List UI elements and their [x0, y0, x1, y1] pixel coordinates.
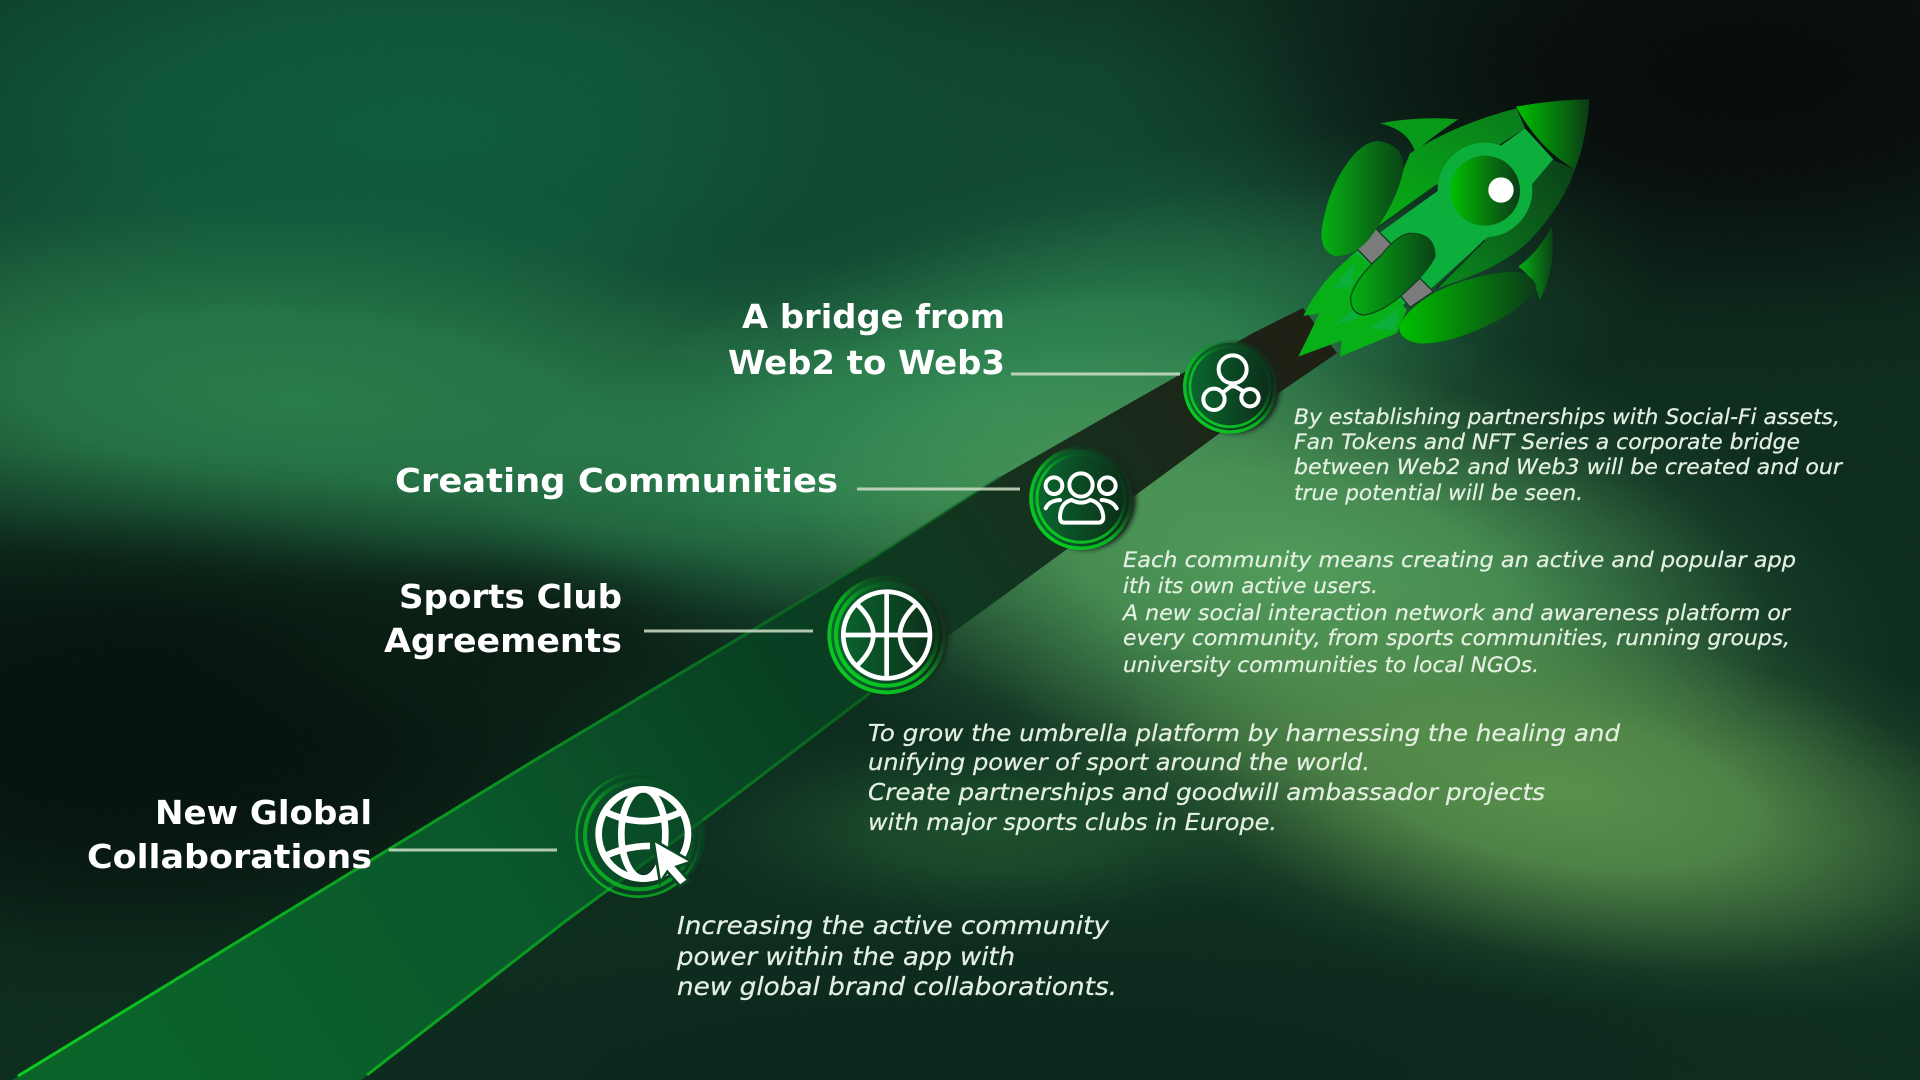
- description: [1294, 405, 1843, 505]
- step: Creating Communities: [395, 448, 1796, 677]
- heading: New Global: [155, 793, 372, 832]
- description: A new social interaction network and awareness platform or: [1121, 601, 1791, 625]
- description: true potential will be seen.: [1294, 481, 1583, 505]
- icon: rocket: [1298, 99, 1589, 357]
- rocket stripe: [1340, 128, 1553, 327]
- description: To grow the umbrella platform by harnessing the healing and: [868, 721, 1620, 747]
- rocket porthole: [1438, 143, 1532, 237]
- heading: A bridge from: [742, 297, 1005, 336]
- description: [868, 721, 1620, 836]
- icon: connected nodes: [1185, 341, 1280, 433]
- description: Each community means creating an active and popular app: [1123, 548, 1796, 572]
- description: [1121, 548, 1796, 677]
- rocket flames: [1298, 253, 1407, 357]
- heading: Agreements: [384, 621, 622, 660]
- rocket connectors: [1357, 227, 1433, 307]
- step: A bridge from Web2 to Web3: [728, 297, 1843, 505]
- description: university communities to local NGOs.: [1123, 653, 1539, 677]
- description: every community, from sports communities, running groups,: [1123, 626, 1790, 650]
- heading: Creating Communities: [395, 461, 838, 500]
- connector lines: [389, 374, 1180, 850]
- heading: Collaborations: [87, 837, 372, 876]
- description: ith its own active users.: [1123, 574, 1378, 598]
- heading: Web2 to Web3: [728, 343, 1005, 382]
- description: power within the app with: [676, 942, 1015, 971]
- description: Increasing the active community: [677, 911, 1110, 940]
- heading: Sports Club: [399, 577, 622, 616]
- description: between Web2 and Web3 will be created and our: [1294, 455, 1843, 479]
- heading: [728, 297, 1005, 382]
- rocket hull: [1377, 108, 1575, 288]
- description: with major sports clubs in Europe.: [868, 810, 1277, 836]
- heading: [384, 577, 622, 660]
- rocket exhaust beam: [12, 308, 1337, 1080]
- step: New Global Collaborations: [87, 773, 1117, 1001]
- icon: globe with cursor: [577, 773, 705, 897]
- description: Fan Tokens and NFT Series a corporate bridge: [1294, 430, 1800, 454]
- description: [676, 911, 1117, 1001]
- step: Sports Club Agreements: [384, 577, 1620, 836]
- icon: people group: [1031, 448, 1136, 550]
- description: Create partnerships and goodwill ambassador projects: [868, 780, 1545, 806]
- description: new global brand collaborationts.: [677, 972, 1117, 1001]
- icon: basketball: [829, 578, 948, 693]
- heading: [87, 793, 372, 876]
- rocket nose: [1516, 99, 1589, 169]
- description: By establishing partnerships with Social-Fi assets,: [1294, 405, 1840, 429]
- description: unifying power of sport around the world.: [868, 750, 1370, 776]
- rocket fins: [1380, 118, 1553, 300]
- rocket boosters: [1321, 141, 1537, 343]
